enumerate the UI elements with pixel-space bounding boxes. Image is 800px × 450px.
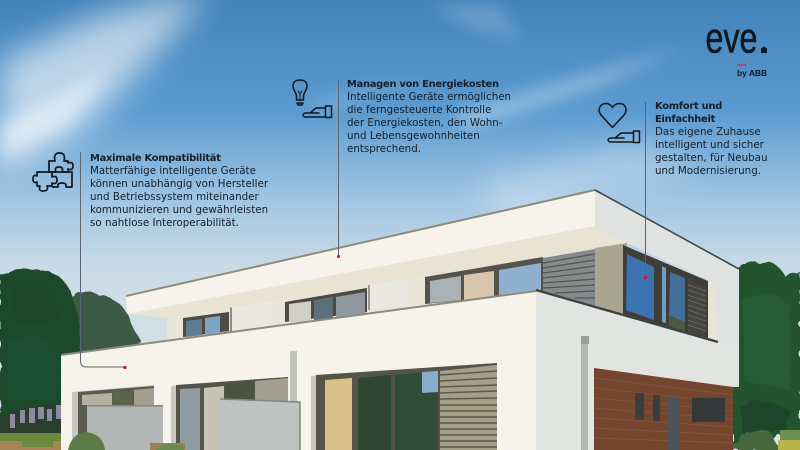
right side wall — [536, 190, 739, 450]
panel: Maximale Kompatibilität: Matterfähige intelligente Geräte — [90, 165, 256, 177]
panel: Managen von Energiekosten: die ferngesteuerte Kontrolle — [347, 104, 491, 116]
trees — [0, 262, 800, 450]
panel: Maximale Kompatibilität — [90, 153, 268, 229]
panel: Komfort und Einfachheit: Einfachheit — [655, 114, 715, 125]
logo: eve by ABB — [706, 22, 767, 78]
panel: Komfort und Einfachheit: gestalten, für Neubau — [655, 152, 767, 164]
panel: Maximale Kompatibilität: kommunizieren und gewährleisten — [90, 204, 268, 216]
panel: Komfort und Einfachheit: intelligent und sicher — [655, 139, 764, 151]
panel: Managen von Energiekosten: Managen von Energiekosten — [347, 79, 499, 90]
panel: Maximale Kompatibilität: so nahtlose Interoperabilität. — [90, 217, 239, 229]
panel: Maximale Kompatibilität: können unabhängig von Hersteller — [90, 178, 268, 190]
upper roof slab — [126, 190, 627, 318]
panel: Komfort und Einfachheit: und Modernisierung. — [655, 165, 761, 177]
ground floor openings — [72, 363, 497, 450]
garden ground — [0, 405, 800, 450]
lower front facade — [61, 290, 718, 450]
wood cladding — [594, 368, 733, 450]
panel: Komfort und Einfachheit: Das eigene Zuhause — [655, 126, 761, 138]
downpipes — [290, 336, 589, 450]
corner window recess — [543, 243, 718, 342]
panel: Managen von Energiekosten: und Lebensgewohnheiten — [347, 130, 480, 142]
panel: Managen von Energiekosten: der Energiekosten, den Wohn- — [347, 117, 503, 129]
panel: Komfort und Einfachheit: Komfort und — [655, 101, 722, 112]
panel: Komfort und Einfachheit — [655, 101, 767, 177]
garden plants — [68, 432, 185, 450]
panel: Managen von Energiekosten — [347, 79, 511, 155]
panel: Managen von Energiekosten: Intelligente Geräte ermöglichen — [347, 91, 511, 103]
panel: Maximale Kompatibilität: Maximale Kompatibilität — [90, 153, 221, 164]
panel: Maximale Kompatibilität: und Betriebssystem miteinander — [90, 191, 259, 203]
panel: Managen von Energiekosten: entsprechend. — [347, 143, 421, 155]
logo: eve by ABB: by ABB — [737, 69, 767, 78]
upper floor — [167, 243, 627, 350]
